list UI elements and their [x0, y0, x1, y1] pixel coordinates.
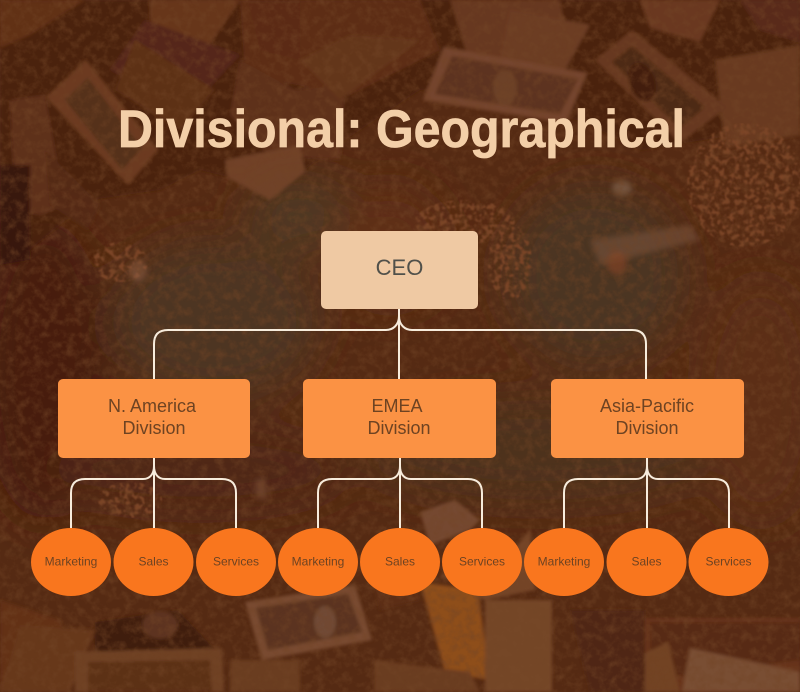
- department: Services (EMEA): [442, 528, 522, 596]
- box: N. America Division: Division: [122, 418, 186, 438]
- department: Sales (Asia-Pacific): Sales: [631, 554, 662, 568]
- box: EMEA Division: [303, 379, 496, 458]
- department: Marketing (N. America): [31, 528, 111, 596]
- banknote pile: top: [0, 0, 800, 265]
- department: Services (N. America): [196, 528, 276, 596]
- banknote pile: bottom: [0, 500, 800, 692]
- map fragments: [129, 180, 700, 500]
- department: Sales (EMEA): Sales: [385, 554, 415, 568]
- department: Sales (EMEA): [360, 528, 440, 596]
- department: Sales (N. America): [114, 528, 194, 596]
- department: Marketing (N. America): Marketing: [45, 554, 97, 568]
- box: N. America Division: [58, 379, 250, 458]
- department: Services (N. America): Services: [213, 554, 259, 568]
- department: Sales (Asia-Pacific): [606, 528, 686, 596]
- connector: N. America to departments: [71, 458, 236, 528]
- box: Asia-Pacific Division: [551, 379, 744, 458]
- box: EMEA Division: EMEA: [371, 396, 423, 416]
- bead clusters: [92, 123, 800, 518]
- title: Divisional: Geographical: [118, 100, 685, 159]
- department: Marketing (Asia-Pacific): [524, 528, 604, 596]
- connector: Asia-Pacific to departments: [564, 458, 729, 528]
- box: Asia-Pacific Division: Division: [615, 418, 679, 438]
- department: Marketing (EMEA): Marketing: [292, 554, 344, 568]
- department: Marketing (Asia-Pacific): Marketing: [538, 554, 590, 568]
- connector: EMEA to departments: [318, 458, 482, 528]
- box: EMEA Division: Division: [367, 418, 431, 438]
- department: Services (Asia-Pacific): [688, 528, 768, 596]
- department: Marketing (EMEA): [278, 528, 358, 596]
- department: Services (Asia-Pacific): Services: [705, 554, 752, 568]
- connector: CEO to divisions: [154, 308, 646, 379]
- department: Services (EMEA): Services: [459, 554, 505, 568]
- box: CEO: CEO: [376, 255, 423, 280]
- box: N. America Division: N. America: [108, 396, 197, 416]
- box: Asia-Pacific Division: Asia-Pacific: [600, 396, 694, 416]
- department: Sales (N. America): Sales: [138, 554, 169, 568]
- box: CEO: [321, 231, 478, 309]
